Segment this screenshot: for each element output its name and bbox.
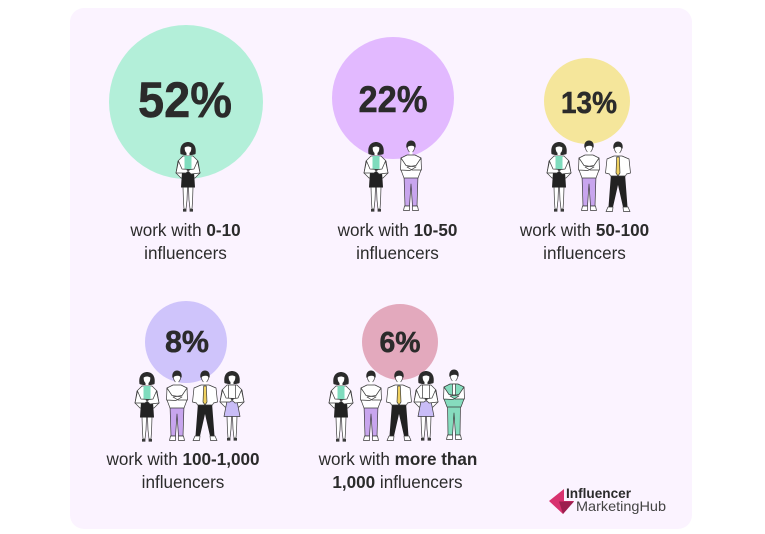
stat: 13% work with 50-100 influencers bbox=[519, 58, 649, 263]
icon: one person bbox=[176, 142, 200, 212]
icons: five people bbox=[329, 370, 464, 442]
circle: 8% bbox=[145, 301, 227, 383]
label: 50-100: influencers bbox=[543, 244, 626, 263]
logo wordmark: Influencer bbox=[566, 485, 632, 501]
label: 10-50: influencers bbox=[356, 244, 439, 263]
label: 50-100: work with 50-100 bbox=[520, 221, 649, 240]
label: 0-10: influencers bbox=[144, 244, 227, 263]
circle: 52% bbox=[109, 25, 263, 179]
stat: 8% work with 100-1,000 influencers bbox=[106, 301, 260, 492]
icon: logo mark bbox=[549, 489, 574, 514]
label: 0-10: work with 0-10 bbox=[130, 221, 241, 240]
value: 6%: 6% bbox=[380, 327, 421, 359]
circle: 22% bbox=[332, 37, 454, 159]
label: 10-50: work with 10-50 bbox=[338, 221, 457, 240]
icons: four people bbox=[135, 370, 244, 442]
value: 8%: 8% bbox=[165, 324, 209, 359]
value: 22%: 22% bbox=[358, 79, 428, 120]
stat: 6% work with more than 1,000 influencers bbox=[318, 304, 477, 492]
icons: three people bbox=[547, 140, 630, 212]
logo: Influencer MarketingHub bbox=[549, 485, 666, 514]
icons: two people bbox=[364, 140, 422, 212]
label: more than 1,000: work with more than bbox=[318, 450, 477, 469]
label: 100-1,000: work with 100-1,000 bbox=[106, 450, 260, 469]
value: 13%: 13% bbox=[561, 85, 617, 120]
background panel bbox=[70, 8, 692, 529]
label: second line: 1,000 influencers bbox=[332, 473, 463, 492]
circle: 6% bbox=[362, 304, 438, 380]
stat: 22% work with 10-50 influencers bbox=[332, 37, 457, 263]
value: 52%: 52% bbox=[138, 72, 232, 128]
label: 100-1,000: influencers bbox=[142, 473, 224, 492]
stat: 52% work with 0-10 influencers bbox=[109, 25, 263, 263]
circle: 13% bbox=[544, 58, 630, 144]
logo: Influencer MarketingHub: MarketingHub bbox=[576, 498, 666, 514]
